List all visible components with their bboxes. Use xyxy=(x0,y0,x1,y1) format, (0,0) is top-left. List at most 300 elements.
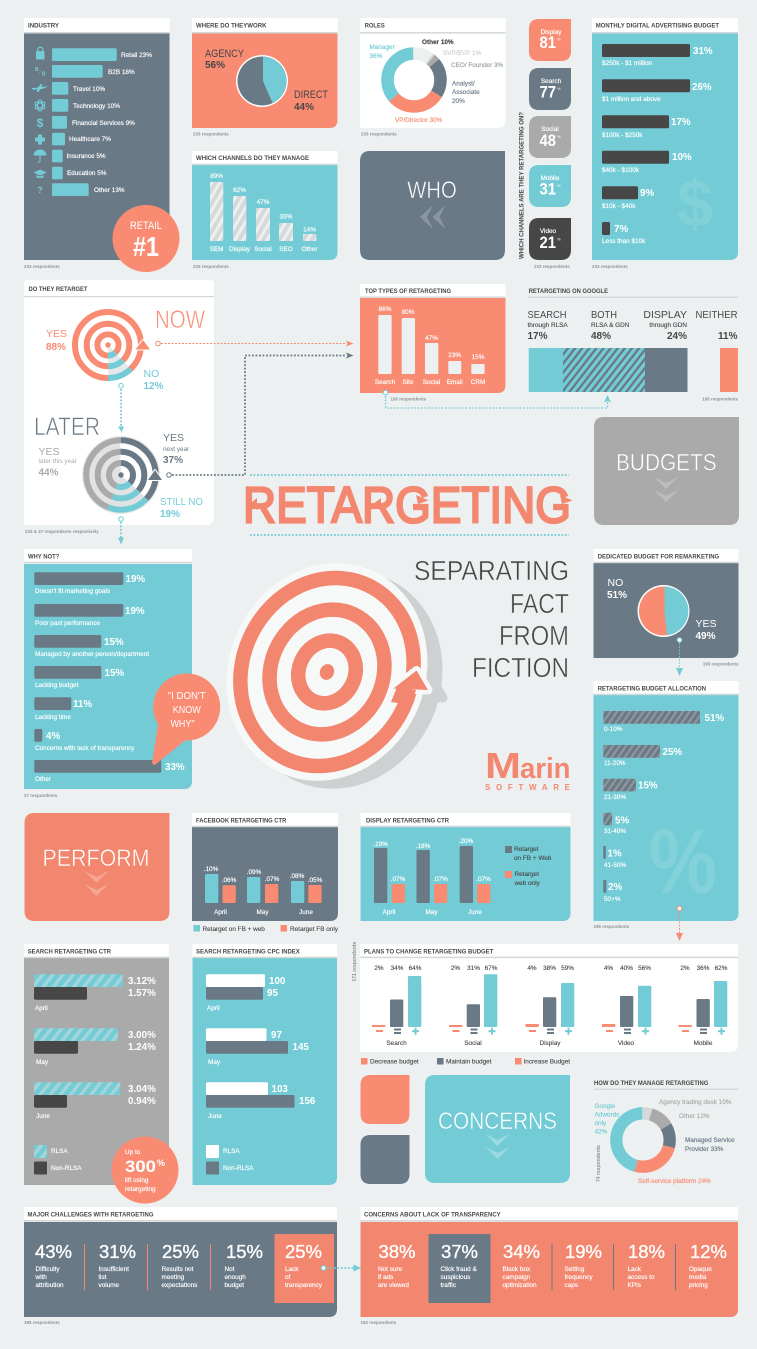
labels: now: NO xyxy=(144,368,159,380)
stat: frequency caps: frequency xyxy=(564,1274,593,1281)
title: RETARGETING xyxy=(243,476,571,534)
labels: later: 37% xyxy=(163,455,183,466)
labels: June xyxy=(36,1113,50,1120)
heading xyxy=(594,681,738,695)
group: mobile: 36% xyxy=(697,965,710,972)
legend: cpc index: Non-RLSA xyxy=(223,1165,254,1172)
panel: dedicated budget xyxy=(594,549,738,658)
group: social: 2% xyxy=(451,965,460,972)
callout: 300% lift: lift using xyxy=(125,1177,149,1184)
labels: .07% xyxy=(265,876,280,883)
pie chart xyxy=(638,585,690,637)
labels: 26% xyxy=(692,82,712,93)
section tile: budgets: BUDGETS xyxy=(616,450,717,477)
donut chart xyxy=(616,1113,670,1167)
stat: expectations xyxy=(162,1242,199,1289)
arrow: still no to why not xyxy=(118,517,124,544)
labels: 36% xyxy=(370,53,383,60)
labels: Managed by another person/department xyxy=(35,651,149,658)
labels: June xyxy=(208,1113,222,1120)
labels: 41-50% xyxy=(604,862,626,869)
group: search: 64% xyxy=(409,965,422,972)
labels: Email xyxy=(447,379,463,386)
labels: .05% xyxy=(308,877,323,884)
stat: opaque pricing: pricing xyxy=(689,1282,708,1289)
callout: 300% lift: Up to xyxy=(125,1149,141,1156)
panel: retargeting on google xyxy=(528,288,738,392)
stat: list volume xyxy=(98,1242,136,1289)
icon: percent watermark: % xyxy=(649,811,717,913)
heading xyxy=(594,549,738,563)
labels: later: 44% xyxy=(38,468,59,478)
panel: cpc index xyxy=(192,944,337,1185)
labels: 19% xyxy=(125,606,145,617)
stat: ads viewed: 38% xyxy=(378,1242,416,1262)
labels: 89% xyxy=(210,173,223,180)
tile: video 21: % xyxy=(557,236,561,242)
logo: marin software: SOFTWARE xyxy=(485,783,571,792)
stat: kpis: access to xyxy=(628,1274,655,1281)
stat: opaque pricing: 12% xyxy=(690,1242,727,1262)
labels: Concerns with lack of transparency xyxy=(35,745,135,752)
target: main illustration xyxy=(191,530,478,822)
group: display: 4% xyxy=(527,965,537,972)
labels: now: 88% xyxy=(46,342,66,353)
labels: industry: Other 13% xyxy=(94,187,125,194)
labels: Less than $10k xyxy=(602,238,646,245)
labels xyxy=(594,1099,735,1185)
stat: expectations: meeting xyxy=(162,1274,185,1281)
labels: 0-10% xyxy=(604,726,623,733)
bar chart xyxy=(378,315,485,374)
subtitle: SEPARATING xyxy=(414,555,569,586)
icon: chevrons down xyxy=(654,477,678,502)
stat: transparency xyxy=(285,1242,323,1289)
tile: mobile 31: % xyxy=(557,183,561,188)
labels: now: YES xyxy=(46,328,67,340)
labels: NEITHER xyxy=(696,309,738,321)
labels: 48% xyxy=(591,331,611,342)
group: social: 67% xyxy=(485,965,498,972)
group: video: 4% xyxy=(604,965,613,972)
group: display xyxy=(526,965,574,1047)
pie chart xyxy=(236,55,288,107)
arrow: later to top types xyxy=(167,352,354,477)
stat: transparency: of xyxy=(285,1274,291,1281)
heading xyxy=(24,944,169,958)
labels: only xyxy=(594,1120,607,1127)
stat: opaque pricing: Opaque xyxy=(689,1266,712,1273)
labels: industry: Retail 23% xyxy=(121,52,152,59)
labels: 9% xyxy=(640,188,654,199)
stat: difficulty: Difficulty xyxy=(36,1266,60,1273)
stat: black box: 34% xyxy=(503,1242,540,1262)
arrow: dedicated to allocation xyxy=(676,638,683,676)
labels: Doesn't fit marketing goals xyxy=(35,588,110,595)
labels: $10k - $40k xyxy=(602,203,636,210)
labels: 0.94% xyxy=(128,1096,156,1107)
callout: retail #1: #1 xyxy=(133,231,159,262)
labels: .06% xyxy=(222,877,237,884)
icon: dollar watermark: $ xyxy=(677,166,713,240)
labels: April xyxy=(214,909,227,916)
callout: i don't know why: "I DON'T xyxy=(168,690,206,702)
source note: 195 respondents xyxy=(594,924,630,929)
labels: 15% xyxy=(104,668,124,679)
heading: industry xyxy=(24,18,170,34)
labels: 23% xyxy=(448,352,461,359)
labels: 1% xyxy=(608,848,622,860)
labels xyxy=(35,976,156,1120)
group: mobile: 2% xyxy=(680,965,690,972)
tile: video 21: Video xyxy=(540,228,557,235)
arrow: now to top types xyxy=(156,340,354,346)
labels: 49% xyxy=(696,631,716,642)
labels: Provider 33% xyxy=(685,1146,724,1153)
heading xyxy=(192,18,338,34)
stat: list volume: volume xyxy=(98,1282,120,1289)
tile: search 77 xyxy=(529,68,571,110)
icon: chevrons left xyxy=(420,205,446,229)
labels: .09% xyxy=(247,869,262,876)
logo: marin software: arin xyxy=(520,753,570,785)
group: search: Search xyxy=(386,1040,407,1047)
labels xyxy=(604,713,724,903)
arrow: now no to later xyxy=(118,383,124,434)
tile: mobile 31: 31 xyxy=(540,180,556,198)
tile: search 77: Search xyxy=(541,78,562,85)
logo: marin software: M xyxy=(485,745,521,786)
panel: which channels do they manage xyxy=(192,151,338,260)
callout: retail #1 xyxy=(112,205,180,272)
arrow: allocation to plans xyxy=(676,906,683,941)
section tile: who xyxy=(360,151,505,260)
heading: DEDICATED BUDGET FOR REMARKETING xyxy=(598,554,719,560)
labels: industry: Healthcare 7% xyxy=(69,136,111,143)
group: video xyxy=(602,965,651,1047)
panel: do they retarget xyxy=(24,280,214,525)
donut chart xyxy=(388,54,440,106)
labels: 21-30% xyxy=(604,794,626,801)
heading: PLANS TO CHANGE RETARGETING BUDGET xyxy=(364,948,493,956)
section tile: who: WHO xyxy=(407,177,457,204)
legend: cpc index xyxy=(206,1145,254,1174)
tile: social 48: 48 xyxy=(540,131,556,150)
labels: 17% xyxy=(528,331,548,342)
tile: mobile 31 xyxy=(529,165,571,207)
labels: Managed Service xyxy=(685,1137,735,1144)
labels: 33% xyxy=(280,214,293,220)
legend: plans: Decrease budget xyxy=(370,1058,419,1066)
tile: display 81: Display xyxy=(541,29,562,36)
heading xyxy=(192,813,338,827)
heading xyxy=(192,151,338,165)
heading xyxy=(24,549,192,563)
stat: frequency caps: 19% xyxy=(565,1242,602,1262)
source note: rotated: 74 respondents xyxy=(596,1145,602,1182)
labels: now xyxy=(46,306,205,392)
labels: May xyxy=(36,1059,49,1066)
labels: 10% xyxy=(672,152,692,163)
labels xyxy=(375,306,485,386)
source note: 233 respondents xyxy=(534,264,570,269)
legend: plans: Increase Budget xyxy=(524,1058,570,1066)
panel: why not xyxy=(24,549,192,789)
panel: plans to change budget xyxy=(360,944,738,1052)
section tile: budgets xyxy=(594,417,739,525)
labels: Analyst/ xyxy=(452,80,475,88)
group: video: 56% xyxy=(638,965,651,972)
labels: Lacking budget xyxy=(35,682,79,689)
legend: display: Retarget xyxy=(514,846,539,853)
source note: 233 respondents xyxy=(24,264,60,269)
labels: later: later this year xyxy=(38,458,78,465)
rotated heading: channels: WHICH CHANNELS ARE THEY RETARGETING ON? xyxy=(518,112,526,259)
panel: search ctr xyxy=(24,944,169,1185)
labels: 33% xyxy=(165,762,185,773)
bar chart xyxy=(206,974,294,1108)
labels: 19% xyxy=(126,574,145,585)
labels: $40k - $100k xyxy=(602,167,640,174)
stat: click fraud: traffic xyxy=(440,1282,457,1289)
labels: 145 xyxy=(292,1042,309,1053)
labels: 2% xyxy=(608,882,622,893)
labels: .10% xyxy=(204,866,219,873)
labels: 51% xyxy=(704,713,724,724)
subtitle xyxy=(414,555,569,683)
labels: VP/Director 30% xyxy=(395,117,443,124)
labels: Self-service platform 24% xyxy=(638,1178,711,1185)
labels xyxy=(370,39,504,124)
labels: 11-20% xyxy=(604,760,626,767)
legend: facebook xyxy=(194,925,339,933)
stat: list volume: 31% xyxy=(99,1242,136,1262)
labels: Manager xyxy=(370,44,396,51)
tile: search 77: 77 xyxy=(540,82,556,102)
bar chart: industry xyxy=(52,48,117,196)
stat: ads viewed: if ads xyxy=(378,1274,393,1281)
labels: YES xyxy=(696,618,717,630)
stat: black box: Black box xyxy=(502,1266,531,1273)
labels: Other xyxy=(302,246,318,253)
labels: $250k - $1 million xyxy=(602,60,653,67)
labels: Lacking time xyxy=(35,714,71,721)
tile: video 21 xyxy=(529,218,571,260)
callout: 300% lift: 300 xyxy=(125,1157,156,1176)
labels: .08% xyxy=(290,873,305,880)
labels: SEARCH xyxy=(528,309,566,321)
heading: MONTHLY DIGITAL ADVERTISING BUDGET xyxy=(596,22,719,30)
source note: rotated: 171 respondents xyxy=(352,942,358,982)
labels: later: STILL NO xyxy=(160,496,203,508)
stat: ads viewed: are viewed xyxy=(378,1282,409,1289)
heading: CONCERNS ABOUT LACK OF TRANSPARENCY xyxy=(364,1212,501,1218)
labels: 5% xyxy=(615,816,629,826)
group: search xyxy=(372,965,422,1047)
labels: .07% xyxy=(391,876,406,883)
stat: click fraud xyxy=(440,1242,478,1289)
labels: later: YES xyxy=(38,446,60,458)
labels xyxy=(35,574,185,783)
labels xyxy=(210,173,318,253)
source note: 233 respondents xyxy=(193,264,229,269)
stat: difficulty xyxy=(34,1242,72,1289)
subtitle: FACT xyxy=(510,588,569,619)
labels: June xyxy=(299,909,313,916)
source note: 233 respondents xyxy=(592,264,628,269)
tile: slate blank xyxy=(360,1135,410,1184)
labels: $100k - $250k xyxy=(602,132,643,139)
labels: .19% xyxy=(373,841,388,848)
labels: April xyxy=(207,1005,220,1012)
labels xyxy=(528,309,738,342)
heading: RETARGETING ON GOOGLE xyxy=(529,288,609,295)
labels: Adwords xyxy=(594,1112,619,1118)
heading xyxy=(360,813,570,827)
labels: industry: Technology 10% xyxy=(73,103,120,110)
labels: Associate xyxy=(452,89,480,96)
group: search: 2% xyxy=(374,965,384,972)
labels: 80% xyxy=(402,309,415,316)
labels: May xyxy=(208,1059,221,1066)
labels: 103 xyxy=(272,1084,288,1095)
stat: difficulty: with xyxy=(34,1274,47,1281)
source note: 27 respondents xyxy=(24,793,58,798)
labels: 1.24% xyxy=(128,1042,156,1053)
legend: plans xyxy=(361,1058,570,1066)
labels: 3.04% xyxy=(128,1084,156,1095)
tile: display 81: 81 xyxy=(540,33,556,52)
labels: 1.57% xyxy=(128,988,156,999)
heading: DISPLAY RETARGETING CTR xyxy=(366,818,449,824)
panel: industry xyxy=(24,18,170,260)
target: later xyxy=(83,437,162,513)
labels: 11% xyxy=(73,699,92,710)
panel: facebook ctr xyxy=(192,813,338,921)
heading xyxy=(192,944,337,958)
labels: 100 xyxy=(269,976,286,987)
heading: SEARCH RETARGETING CPC INDEX xyxy=(196,948,300,956)
stat: difficulty: 43% xyxy=(35,1242,72,1262)
legend: search ctr xyxy=(34,1145,82,1174)
labels: 97 xyxy=(271,1030,282,1041)
labels: industry: Travel 10% xyxy=(73,86,105,93)
labels: April xyxy=(383,909,395,916)
heading: WHY NOT? xyxy=(28,554,59,560)
source note: 233 & 27 respondents respectively xyxy=(25,529,99,534)
labels: industry: Financial Services 9% xyxy=(72,120,135,127)
labels: 20% xyxy=(452,98,465,105)
callout: 300% lift xyxy=(112,1136,178,1204)
bar chart xyxy=(34,974,123,1108)
stat: kpis: 18% xyxy=(628,1242,665,1262)
panel: roles xyxy=(360,18,506,128)
group: mobile: Mobile xyxy=(694,1040,713,1047)
icons: industry: B xyxy=(42,72,46,78)
stat: black box: optimization xyxy=(502,1282,537,1289)
icons: industry xyxy=(32,47,48,195)
heading: HOW DO THEY MANAGE RETARGETING xyxy=(594,1080,708,1087)
bar chart xyxy=(374,846,490,903)
labels: CEO/ Founder 3% xyxy=(451,62,504,69)
labels: BOTH xyxy=(591,309,617,321)
panel: where do they work xyxy=(192,18,338,128)
heading: WHICH CHANNELS DO THEY MANAGE xyxy=(196,155,310,162)
group: mobile xyxy=(678,965,728,1047)
panel: display ctr xyxy=(360,813,570,921)
callout: 300% lift: retargeting xyxy=(125,1186,156,1193)
labels: SEO xyxy=(279,246,293,253)
heading: TOP TYPES OF RETARGETING xyxy=(365,288,451,295)
group: display: 38% xyxy=(543,965,556,972)
labels xyxy=(602,46,713,245)
labels: 25% xyxy=(662,747,682,758)
labels: 24% xyxy=(667,331,687,342)
stat: budget xyxy=(224,1242,263,1289)
labels: 31% xyxy=(693,46,713,57)
source note: 192 respondents xyxy=(360,1320,397,1325)
section tile: concerns xyxy=(425,1075,570,1183)
bar chart xyxy=(205,874,322,903)
labels: 15% xyxy=(472,354,485,361)
source note: 233 respondents xyxy=(361,132,397,136)
labels: $1 million and above xyxy=(602,96,661,103)
heading xyxy=(24,1207,337,1222)
labels xyxy=(607,577,717,642)
stat: difficulty: attribution xyxy=(36,1282,64,1289)
labels: 86% xyxy=(379,306,392,313)
labels: Other 10% xyxy=(422,39,454,46)
labels: Other 12% xyxy=(679,1113,710,1120)
stat: opaque pricing xyxy=(689,1242,727,1289)
tile: display 81 xyxy=(529,19,571,61)
labels: Site xyxy=(402,379,414,386)
stat: list volume: Insufficient xyxy=(98,1266,129,1273)
labels: 3.12% xyxy=(128,976,156,987)
stat: expectations: Results not xyxy=(162,1266,194,1273)
heading: FACEBOOK RETARGETING CTR xyxy=(196,818,287,824)
legend: search ctr: Non-RLSA xyxy=(51,1165,82,1172)
legend: facebook: Retarget FB only xyxy=(290,926,339,933)
heading xyxy=(360,18,506,34)
heading: industry: INDUSTRY xyxy=(28,22,60,30)
callout: i don't know why xyxy=(152,674,220,765)
arrow: top types to google xyxy=(383,390,611,408)
icons: industry: 2 xyxy=(39,70,41,74)
stat: click fraud: suspicious xyxy=(440,1274,470,1281)
labels: June xyxy=(468,909,482,916)
icons: industry: ? xyxy=(37,185,43,195)
callout: i don't know why: KNOW xyxy=(173,704,201,716)
legend: display: Retarget xyxy=(514,871,539,878)
highlight box xyxy=(428,1234,490,1303)
group: social: 31% xyxy=(467,965,480,972)
labels: May xyxy=(256,909,269,916)
bar chart xyxy=(603,711,700,825)
target: now xyxy=(75,312,150,378)
legend: display: on FB + Web xyxy=(514,855,552,862)
callout: i don't know why: WHY" xyxy=(170,718,195,730)
labels: Other xyxy=(35,776,52,783)
labels: Poor past performance xyxy=(35,620,100,627)
legend: display: web only xyxy=(514,880,541,887)
stat: black box xyxy=(502,1242,540,1289)
section tile: concerns: CONCERNS xyxy=(438,1108,557,1135)
labels: 156 xyxy=(299,1096,316,1107)
stat: click fraud: Click fraud & xyxy=(440,1266,477,1273)
tile: search 77: % xyxy=(557,86,561,91)
source note: 195 respondents xyxy=(702,396,738,402)
